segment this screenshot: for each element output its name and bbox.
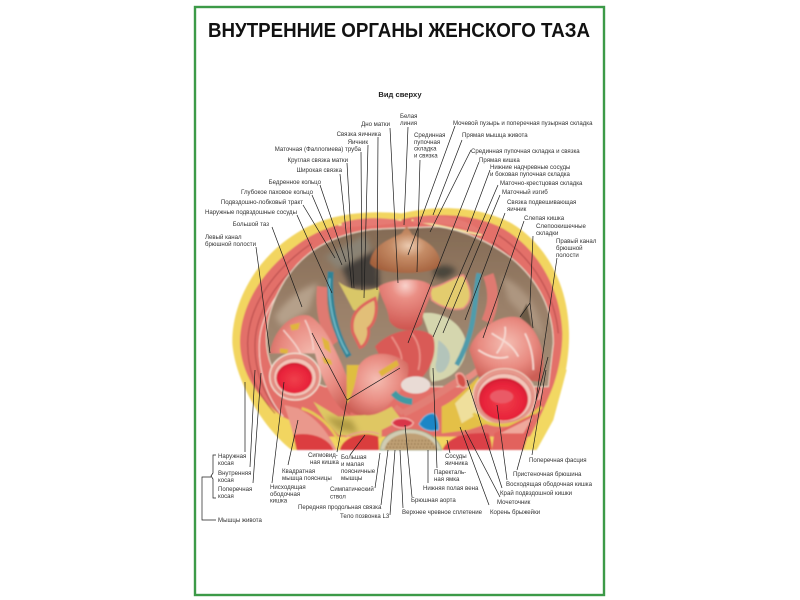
label: caecum: Слепая кишка — [524, 215, 565, 222]
yellow strip around left muscle — [302, 408, 340, 443]
mesentery tube stem — [395, 407, 403, 413]
label: bladder: Мочевой пузырь и поперечная пузырная складка — [453, 120, 593, 127]
leader lines: top right — [404, 126, 557, 470]
yellow fat under sigmoid — [347, 365, 372, 413]
rectus sheath yellow — [338, 220, 482, 235]
label: suspensory ligament: яичник — [507, 206, 527, 213]
label: pararectal fossa: ная ямка — [434, 476, 460, 483]
right colon inner rim — [477, 374, 532, 422]
yellow outer right bottom — [523, 367, 567, 450]
right central psoas — [442, 433, 492, 450]
label: ovarian vessels: Сосуды — [445, 453, 467, 460]
right lateral muscle pale — [500, 417, 533, 433]
rectus right pink — [413, 216, 483, 233]
label: right paracolic gutter: Правый канал — [556, 238, 596, 245]
ileum rear — [467, 367, 482, 378]
central left psoas top — [345, 432, 379, 437]
label: sympathetic trunk: ствол — [330, 494, 346, 500]
pale fat right — [455, 388, 478, 423]
olive shadow bottom — [325, 417, 358, 433]
label: sympathetic trunk: Симпатический — [330, 486, 374, 493]
label: descending colon: кишка — [270, 498, 288, 505]
label: median umbilical fold right: Срединная пупочная складка и связка — [471, 148, 580, 155]
vena cava — [419, 413, 439, 431]
label: external iliac vessels: Наружные подвздошные сосуды — [205, 209, 297, 216]
label: round ligament: Круглая связка матки — [288, 157, 348, 164]
label: median umbilical fold: Срединная — [414, 132, 445, 139]
bladder dome — [370, 226, 440, 273]
label: pararectal fossa: Паректаль- — [434, 469, 466, 476]
label: uterine flexion: Маточный изгиб — [502, 189, 548, 196]
label: ascending colon: Восходящая ободочная кишка — [506, 481, 593, 488]
uterus — [378, 280, 432, 330]
descending colon folds — [283, 320, 313, 357]
grey fold upper left — [325, 235, 372, 270]
peritoneal cavity — [266, 227, 553, 387]
colon fat spots — [280, 323, 332, 365]
leader lines: bottom right — [400, 368, 507, 508]
label: median umbilical fold: складка — [414, 146, 437, 153]
anatomical illustration — [232, 208, 569, 450]
sigmoid loop fold lines — [392, 333, 420, 370]
body wall: yellow fat — [232, 208, 569, 450]
label: L3 vertebra: Тело позвонка L3 — [340, 513, 390, 520]
sigmoid dark loop — [375, 330, 435, 387]
ileum end — [456, 373, 466, 388]
dark recess right — [433, 265, 457, 279]
label: inferior vena cava: Нижняя полая вена — [423, 485, 479, 492]
label: transverse: косая — [218, 493, 234, 500]
vertebral body — [384, 433, 438, 450]
label: median umbilical fold: пупочная — [414, 139, 440, 146]
label: ovary: Яичник — [348, 139, 368, 146]
pale fold left — [275, 283, 318, 327]
left colon inner rim — [274, 358, 316, 396]
right colon ring — [473, 369, 536, 425]
label: median umbilical fold: и связка — [414, 152, 438, 159]
vertebra grain — [386, 441, 436, 447]
label: linea alba: линия — [400, 120, 417, 127]
label: ovarian vessels: яичника — [445, 460, 468, 467]
label: left paracolic gutter: брюшной полости — [205, 241, 256, 248]
yellow rim under right ring — [473, 407, 542, 425]
right adnexa — [429, 275, 470, 309]
left lower muscle red — [293, 434, 333, 450]
label: iliopubic tract: Подвздошно-лобковый тракт — [221, 199, 303, 206]
label: deep inguinal ring: Глубокое паховое кольцо — [241, 189, 314, 196]
label: linea alba: Белая — [400, 113, 417, 120]
vertebra rim — [380, 429, 442, 450]
dark recess left — [340, 250, 380, 288]
label: psoas muscles: Большая — [341, 454, 367, 461]
yellow fat bottom right — [442, 377, 488, 433]
white loop — [401, 376, 430, 394]
descending colon body — [270, 315, 355, 415]
label: external oblique: косая — [218, 460, 234, 467]
label: greater pelvis: Большой таз — [233, 221, 269, 228]
label: rectouterine fold: Маточно-крестцовая складка — [500, 180, 583, 187]
label: psoas muscles: и малая — [341, 461, 364, 468]
leader lines: bottom left — [245, 333, 400, 515]
label: caecal folds: складки — [536, 230, 558, 237]
left ovary and tube — [352, 298, 376, 347]
label: quadratus lumborum: Квадратная — [282, 468, 315, 475]
ureter highlight — [329, 278, 348, 354]
aorta — [392, 418, 413, 428]
right colon lumen — [479, 378, 528, 421]
pale fold right — [502, 277, 543, 340]
body wall: muscle band — [240, 215, 562, 437]
label: fallopian tube: Маточная (Фаллопиева) труба — [275, 146, 362, 153]
label: internal oblique: косая — [218, 477, 234, 484]
label: internal oblique: Внутренняя — [218, 470, 251, 477]
label: psoas muscles: мышцы — [341, 475, 362, 482]
leader lines: top left — [256, 128, 398, 353]
dark crease right — [520, 303, 533, 332]
label: quadratus lumborum: мышца поясницы — [282, 475, 332, 482]
label: ovarian ligament: Связка яичника — [337, 131, 382, 138]
label: ureter: Мочеточник — [497, 499, 531, 506]
sigmoid pale loop — [344, 354, 409, 416]
caecum body — [469, 317, 543, 382]
label: external oblique: Наружная — [218, 453, 246, 460]
label: transverse fascia: Поперечная фасция — [529, 457, 587, 464]
pale intestine — [422, 313, 467, 382]
right lateral muscle — [492, 413, 535, 450]
muscle fascia light lines — [259, 247, 546, 417]
left adnexa fat — [338, 282, 380, 315]
label: transverse: Поперечная — [218, 486, 252, 493]
central left psoas — [340, 434, 379, 450]
label: inferior epigastric vessels: Нижние надчревные сосуды — [490, 164, 570, 171]
label: inferior epigastric vessels: и боковая пупочная складка — [490, 171, 571, 178]
label: psoas muscles: поясничные — [341, 468, 376, 475]
subtitle: Вид сверху — [378, 90, 422, 99]
label: rectus abdominis: Прямая мышца живота — [462, 132, 528, 139]
label: fundus: Дно матки — [361, 121, 390, 128]
label: abdominal muscles: Мышцы живота — [218, 517, 263, 524]
left lower muscle pale — [284, 405, 337, 450]
teal vessel centre — [393, 393, 412, 402]
label: anterior longitudinal ligament: Передняя продольная связка — [298, 504, 382, 511]
label: superior hypogastric plexus: Верхнее чревное сплетение — [402, 509, 483, 516]
label: parietal peritoneum: Пристеночная брюшина — [513, 471, 582, 478]
mesentery tube — [403, 380, 460, 413]
rectus left pink — [342, 218, 400, 227]
label: right paracolic gutter: полости — [556, 252, 579, 259]
label: sigmoid colon: Сигмовид- — [308, 452, 338, 459]
muscle group brackets — [202, 455, 216, 520]
label: ileal edge: Край подвздошной кишки — [500, 490, 572, 497]
label: abdominal aorta: Брюшная аорта — [411, 497, 456, 504]
muscle fibre lines — [248, 235, 558, 413]
caecum folds — [478, 327, 533, 370]
label: femoral ring: Бедренное кольцо — [269, 179, 322, 186]
right vessels: pink — [487, 275, 493, 322]
label: broad ligament: Широкая связка — [297, 167, 343, 174]
frame — [195, 7, 604, 595]
left colon ring — [270, 353, 320, 400]
left colon lumen — [276, 363, 312, 393]
label: caecal folds: Слепоокишечные — [536, 223, 586, 230]
right lumen highlight — [490, 390, 513, 403]
right vessels: blue — [457, 273, 479, 365]
label: descending colon: ободочная — [270, 491, 300, 498]
left ureter: blue vessel — [330, 272, 349, 357]
label: descending colon: Нисходящая — [270, 484, 306, 491]
label: right paracolic gutter: брюшной — [556, 245, 582, 252]
label: sigmoid colon: ная кишка — [310, 459, 340, 466]
sigmoid fat — [378, 360, 399, 377]
label: rectum: Прямая кишка — [479, 157, 520, 164]
label: left paracolic gutter: Левый канал — [205, 234, 242, 241]
title: ВНУТРЕННИЕ ОРГАНЫ ЖЕНСКОГО ТАЗА — [208, 19, 590, 42]
label: suspensory ligament: Связка подвешивающая — [507, 199, 576, 206]
pink vessel left — [322, 287, 335, 343]
yellow fat bottom centre — [313, 402, 402, 438]
pale intestine grey fold — [436, 340, 450, 373]
label: mesentery root: Корень брыжейки — [490, 509, 540, 516]
